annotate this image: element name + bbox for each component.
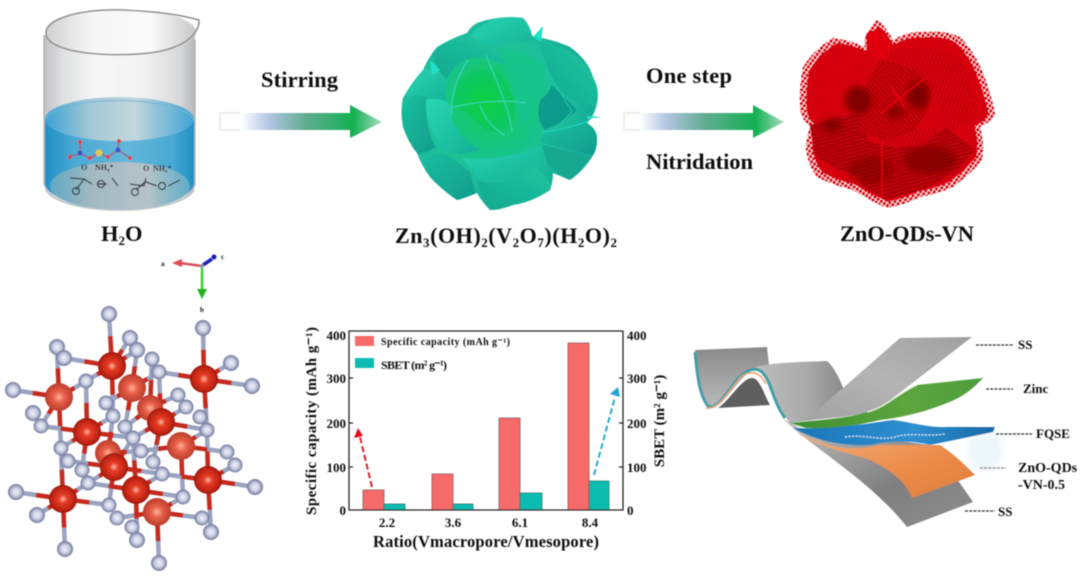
label: One step: One step: [646, 63, 732, 88]
x axis tick labels: [379, 515, 599, 530]
callout: ZnO-QDs-VN-0.5 label: -VN-0.5: [1018, 478, 1065, 493]
label: Zn3(OH)2(V2O7)(H2O)2: )(H: [544, 223, 577, 248]
left axis tick labels: 100: [326, 460, 346, 475]
label: ZnO-QDs-VN: ZnO-QDs-VN: [840, 221, 974, 246]
x axis title: Ratio(Vmacropore/Vmesopore): [373, 532, 599, 551]
illustration: green Zn3(OH)2(V2O7)(H2O)2 nanoflower: [400, 15, 602, 212]
molecule: zinc nitrate and vanadyl precursor: O: [81, 163, 87, 172]
molecule: zinc nitrate and vanadyl precursor: [68, 139, 180, 196]
layer: thin edge of cell: [695, 352, 785, 418]
molecule: zinc nitrate and vanadyl precursor: O: [143, 164, 149, 173]
x axis tick labels: 8.4: [582, 515, 599, 530]
layer: ZnO-QDs-VN-0.5 cathode: [797, 433, 975, 498]
callout: SS bottom label: SS: [998, 504, 1012, 519]
label: Zn3(OH)2(V2O7)(H2O)2: (OH): [430, 223, 481, 248]
bar chart: specific capacity and SBET vs pore ratio: [304, 327, 668, 551]
callout: SS bottom label: [965, 504, 1012, 519]
layer: zinc: [790, 378, 983, 429]
callout: ZnO-QDs-VN-0.5 label: ZnO-QDs: [1018, 461, 1078, 476]
right axis tick labels: 100: [627, 460, 646, 475]
left axis tick labels: 0: [340, 503, 346, 518]
chart frame and ticks: [349, 331, 623, 510]
bars: specific capacity: [363, 343, 589, 510]
x axis tick labels: 6.1: [512, 515, 528, 530]
callout: SS top label: SS: [1018, 337, 1032, 352]
layer: gel electrolyte FQSE: [967, 428, 1003, 472]
right axis tick labels: [627, 328, 646, 518]
label: Zn3(OH)2(V2O7)(H2O)2: (V: [488, 223, 512, 248]
legend: SBET (m² g⁻¹): [381, 358, 447, 372]
right axis tick labels: 200: [627, 416, 646, 431]
right axis tick labels: 300: [627, 371, 646, 386]
legend: [355, 336, 510, 372]
molecule: zinc nitrate and vanadyl precursor: NH₄⁺: [95, 163, 114, 172]
label: Zn3(OH)2(V2O7)(H2O)2: 7: [537, 235, 544, 250]
label: Zn3(OH)2(V2O7)(H2O)2: Zn: [395, 223, 422, 248]
layer: bottom SS sheet: [782, 418, 973, 527]
label: Zn3(OH)2(V2O7)(H2O)2: 2: [610, 235, 617, 250]
label: Zn3(OH)2(V2O7)(H2O)2: 2: [578, 235, 584, 250]
right axis title: SBET (m² g⁻¹): [652, 375, 668, 467]
layer: back SS sheet: [695, 347, 769, 406]
arrow: blue dashed trend: [594, 387, 620, 475]
callout: FQSE label: FQSE: [1036, 426, 1070, 441]
label: Nitridation: Nitridation: [646, 149, 753, 174]
icon: crystal axis triad: b: [200, 306, 204, 314]
label: Stirring: Stirring: [261, 67, 339, 92]
callout: Zinc label: [986, 381, 1049, 396]
atoms: nitrogen, light grey: [5, 306, 263, 571]
label: Zn3(OH)2(V2O7)(H2O)2: O): [585, 223, 610, 248]
icon: crystal axis triad: c: [221, 253, 224, 261]
layer: top SS hump: [755, 361, 844, 423]
label: Zn3(OH)2(V2O7)(H2O)2: O: [520, 223, 537, 248]
callout: Zinc label: Zinc: [1023, 381, 1049, 396]
right axis tick labels: 0: [627, 503, 634, 518]
legend: Specific capacity (mAh g⁻¹): [381, 337, 510, 348]
label: Zn3(OH)2(V2O7)(H2O)2: 2: [481, 235, 488, 250]
arrow: stirring step: [220, 105, 382, 138]
arrow: nitridation step: [624, 105, 784, 138]
x axis tick labels: 2.2: [379, 515, 395, 530]
left axis tick labels: 200: [326, 416, 346, 431]
arrow: red dashed trend: [354, 428, 372, 487]
label: H2O: O: [125, 221, 143, 246]
label: Zn3(OH)2(V2O7)(H2O)2: 3: [423, 235, 430, 250]
label: H2O: H: [101, 221, 119, 246]
atoms: zinc, red: [45, 352, 222, 526]
layer: dark underside: [718, 378, 770, 408]
icon: crystal axis triad: [161, 253, 224, 314]
illustration: crystal structure: [5, 306, 263, 571]
icon: beaker with blue precursor solution: [44, 9, 199, 211]
left axis title: Specific capacity (mAh g⁻¹): [304, 327, 320, 515]
molecule: zinc nitrate and vanadyl precursor: NH₄⁺: [153, 164, 172, 173]
callout: ZnO-QDs-VN-0.5 label: [980, 461, 1078, 493]
right axis tick labels: 400: [627, 328, 646, 343]
callout: SS top label: [976, 337, 1032, 352]
x axis tick labels: 3.6: [445, 515, 462, 530]
layer: top SS sheet: [803, 337, 972, 421]
left axis tick labels: 400: [326, 328, 346, 343]
bars: SBET: [384, 481, 609, 510]
callout: FQSE label: [996, 426, 1070, 441]
illustration: flexible battery layer stack: [695, 337, 1003, 527]
illustration: red ZnO-QDs-VN nanoflower: [800, 20, 995, 208]
label: H2O: 2: [119, 233, 125, 248]
left axis tick labels: 300: [326, 371, 346, 386]
label: Zn3(OH)2(V2O7)(H2O)2: 2: [513, 235, 519, 250]
icon: crystal axis triad: a: [161, 260, 165, 268]
left axis tick labels: [326, 328, 346, 518]
